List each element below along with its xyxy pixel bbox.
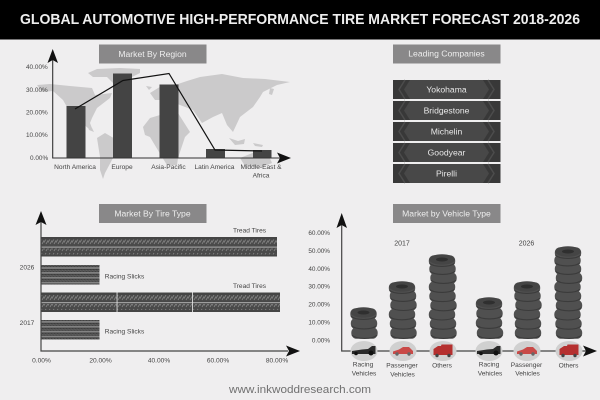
heading [99, 44, 206, 64]
vehicle labels: Racing [479, 362, 500, 368]
icon: racing car 2017 [350, 341, 378, 361]
y axis labels: 50.00% [308, 248, 330, 255]
year labels: 2026 [519, 240, 534, 248]
heading: Leading Companies [408, 48, 485, 58]
trend line [75, 74, 262, 151]
vehicle labels: Vehicles [390, 372, 415, 378]
y axis labels: 10.00% [26, 132, 48, 139]
tire stack: 2026 passenger [514, 281, 542, 339]
tire stack: 2017 others [429, 254, 457, 339]
year labels: 2026 [20, 264, 35, 272]
vehicle labels: Passenger [386, 362, 419, 370]
vehicle labels: Others [432, 362, 453, 370]
bar labels [105, 228, 267, 336]
bar: 2017 racing slicks [41, 320, 100, 340]
world map backdrop [37, 68, 290, 179]
x axis labels [32, 358, 288, 364]
y axis labels: 30.00% [308, 284, 330, 290]
company: Bridgestone: Bridgestone [424, 106, 470, 116]
y axis labels: 30.00% [26, 87, 48, 94]
y axis labels [308, 230, 330, 344]
company: Michelin: Michelin [431, 127, 462, 137]
heading [393, 204, 500, 223]
company: Pirelli: Pirelli [436, 169, 457, 179]
vehicle labels: Others [559, 362, 579, 370]
y axis labels: 40.00% [308, 266, 330, 273]
x axis labels: 80.00% [266, 358, 288, 364]
panel: leading companies [393, 44, 500, 183]
bar labels: Racing Slicks [105, 274, 145, 280]
heading: Market by Vehicle Type [402, 208, 491, 218]
x axis labels: 20.00% [89, 358, 112, 364]
x axis labels: 0.00% [32, 358, 51, 364]
heading: Market By Tire Type [114, 208, 191, 218]
y axis labels: 0.00% [312, 338, 330, 344]
category labels: Middle-East & [240, 164, 282, 171]
year labels [394, 240, 534, 248]
x axis labels: 40.00% [148, 358, 170, 364]
bar: 2026 racing slicks [41, 265, 100, 284]
x axis labels: 60.00% [207, 358, 229, 364]
axes with arrows [36, 211, 300, 356]
vehicle labels: Vehicles [515, 370, 540, 378]
icon: racing car 2026 [476, 341, 502, 361]
icon: passenger car 2017 [390, 341, 416, 361]
tire stack: 2026 others [554, 246, 582, 339]
bar labels: Tread Tires [233, 283, 267, 290]
icon: truck 2017 [430, 341, 456, 361]
header banner [0, 0, 600, 40]
heading: Market By Region [118, 49, 187, 59]
bar: 2017 tread tires [41, 292, 280, 312]
company: Goodyear: Goodyear [428, 148, 466, 158]
year labels [20, 264, 35, 327]
icon: truck 2026 [556, 341, 582, 361]
y axis labels: 0.00% [30, 155, 48, 162]
company: Yokohama: Yokohama [426, 85, 467, 95]
tire stack: 2017 racing [350, 307, 378, 339]
panel: market by tire type [20, 204, 300, 364]
y axis labels: 40.00% [26, 64, 48, 71]
tire stack: 2017 passenger [389, 281, 417, 339]
vehicle labels: Passenger [511, 362, 543, 369]
year labels: 2017 [394, 240, 410, 248]
bar labels: Racing Slicks [105, 328, 145, 336]
vehicle labels: Racing [353, 362, 374, 368]
category labels: North America [54, 164, 96, 171]
panel: market by region [26, 44, 291, 180]
bars [66, 74, 272, 158]
panel: market by vehicle type [308, 204, 597, 378]
vehicle labels: Vehicles [478, 370, 503, 378]
tire stack: 2026 racing [476, 297, 503, 339]
category labels: Latin America [195, 164, 235, 171]
vehicle labels [352, 362, 579, 378]
axes with arrows [48, 49, 291, 164]
y axis labels: 10.00% [308, 320, 330, 326]
y axis labels [26, 64, 48, 162]
category labels: Asia-Pacific [151, 164, 186, 171]
website footer: www.inkwoddresearch.com [228, 384, 371, 396]
category labels: Africa [253, 172, 270, 180]
bar: 2026 tread tires [41, 237, 277, 256]
bar labels: Tread Tires [233, 228, 267, 234]
y axis labels: 60.00% [308, 230, 330, 237]
y axis labels: 20.00% [26, 110, 48, 116]
axes with arrows [336, 213, 597, 356]
category labels: Europe [111, 164, 133, 171]
heading [99, 204, 206, 223]
icon: passenger car 2026 [514, 341, 540, 361]
year labels: 2017 [20, 320, 35, 327]
category labels [54, 164, 282, 180]
vehicle labels: Vehicles [352, 370, 377, 378]
y axis labels: 20.00% [308, 302, 330, 308]
